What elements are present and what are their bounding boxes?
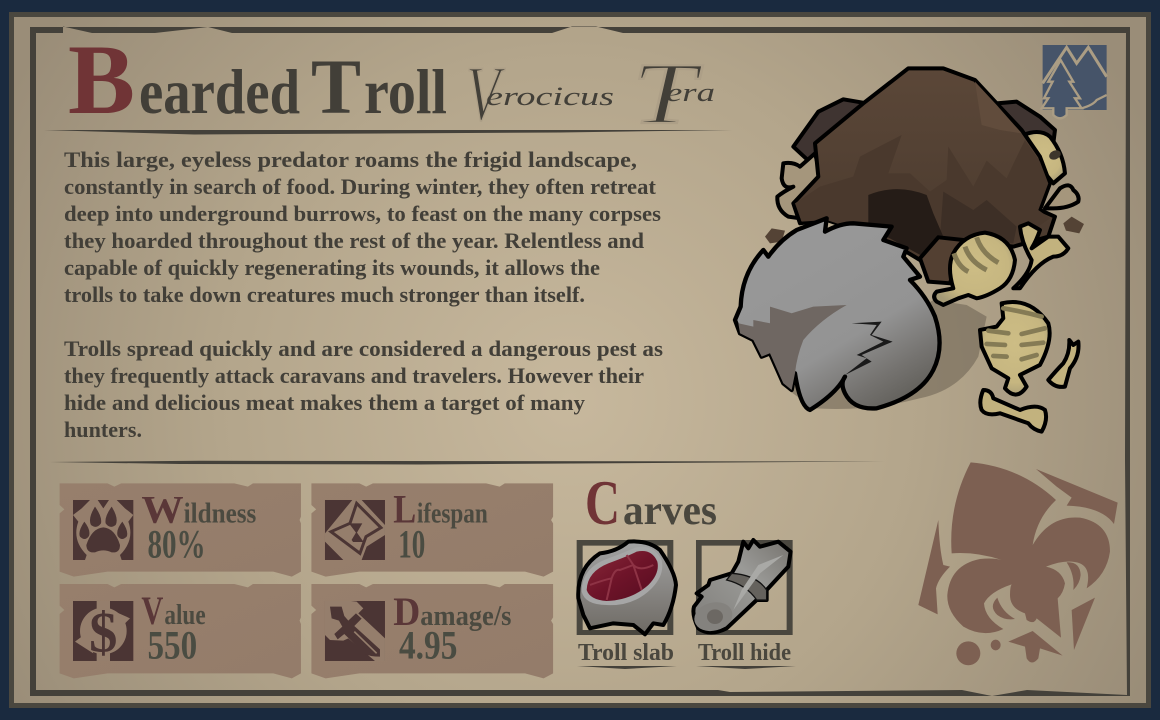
stat: wildness label: W — [141, 488, 184, 532]
stat icons — [73, 500, 385, 665]
rib cage lower — [980, 302, 1050, 395]
icon: hourglass — [325, 500, 385, 560]
panel: damage — [311, 584, 553, 678]
rock facets — [795, 135, 1050, 257]
description text: they hoarded throughout the rest of the year. Relentless and — [64, 228, 644, 253]
description text: constantly in search of food. During winter, they often retreat — [64, 174, 657, 199]
rock dark facet — [940, 192, 1017, 243]
ribs lower — [987, 308, 1045, 359]
main rock — [793, 68, 1055, 260]
big bone — [1013, 223, 1068, 288]
stat: lifespan label: L — [393, 487, 416, 532]
item: troll slab — [578, 541, 676, 634]
carves heading: arves — [623, 488, 717, 534]
panel: wildness — [60, 483, 301, 577]
description text: hide and delicious meat makes them a target of many — [64, 390, 585, 415]
label: troll slab: Troll slab — [578, 640, 674, 666]
title divider — [44, 130, 732, 134]
emblem: fleur-de-lis — [918, 462, 1118, 665]
rock chips — [765, 217, 1084, 243]
stat panels — [60, 483, 553, 678]
scientific name: era — [666, 78, 715, 107]
single bone right — [1048, 340, 1079, 387]
description text: capable of quickly regenerating its wounds, it allows the — [64, 255, 600, 280]
title: earded — [139, 57, 300, 127]
item: troll hide — [691, 540, 791, 635]
stat: damage value: 4.95 — [399, 623, 457, 668]
ground shadow — [788, 300, 987, 409]
stat: value label: V — [141, 588, 163, 633]
fur body — [735, 218, 940, 410]
description text — [64, 147, 663, 442]
item: troll slab frame — [577, 540, 673, 635]
panel: value — [60, 584, 301, 678]
rock light facet — [975, 82, 1022, 133]
icon: sword — [325, 601, 385, 661]
right bone — [1045, 185, 1079, 208]
stat: value number: 550 — [147, 623, 197, 668]
stat: wildness label: ildness — [184, 499, 256, 530]
scientific name: V — [466, 50, 506, 137]
carves items — [577, 540, 793, 635]
stat: lifespan label: ifespan — [417, 499, 488, 530]
title: B — [68, 24, 135, 135]
carves heading: C — [585, 467, 620, 538]
ribs top — [954, 237, 998, 272]
panel: lifespan — [311, 483, 553, 577]
single bone bottom — [980, 390, 1046, 432]
label: troll hide: Troll hide — [698, 640, 791, 666]
stat: value label: alue — [164, 600, 206, 631]
stat: wildness value: 80% — [147, 522, 206, 566]
icon: coin: $ — [89, 603, 117, 665]
icon: paw — [73, 500, 133, 560]
rib cage top — [934, 233, 1015, 305]
fur tuft — [845, 322, 893, 375]
description text: This large, eyeless predator roams the frigid landscape, — [64, 147, 637, 172]
icon: coin — [73, 601, 133, 665]
fur dark patch — [738, 305, 847, 390]
stat: lifespan value: 10 — [398, 522, 425, 566]
stat: damage label: D — [393, 589, 420, 634]
stat: damage label: amage/s — [420, 601, 512, 632]
icon: forest biome — [1042, 45, 1107, 118]
illustration: bearded troll curled beside its bone pile — [735, 68, 1084, 432]
description text: they frequently attack caravans and travelers. However their — [64, 363, 644, 388]
left bones — [777, 153, 820, 218]
description text: trolls to take down creatures much stronger than itself. — [64, 282, 585, 307]
section divider — [50, 461, 885, 464]
description text: hunters. — [64, 417, 142, 442]
description text: Trolls spread quickly and are considered a dangerous pest as — [64, 336, 663, 361]
description text: deep into underground burrows, to feast on the many corpses — [64, 201, 661, 226]
back rocks — [793, 99, 1055, 168]
title: roll — [364, 57, 447, 127]
cave opening — [868, 189, 943, 257]
skull — [1023, 132, 1065, 183]
title: T — [311, 43, 361, 130]
skull eye — [1048, 149, 1062, 161]
scientific name: T — [632, 46, 704, 143]
item: troll hide frame — [696, 540, 793, 635]
scientific name: erocicus — [486, 82, 614, 111]
small fallen rock — [920, 237, 963, 283]
